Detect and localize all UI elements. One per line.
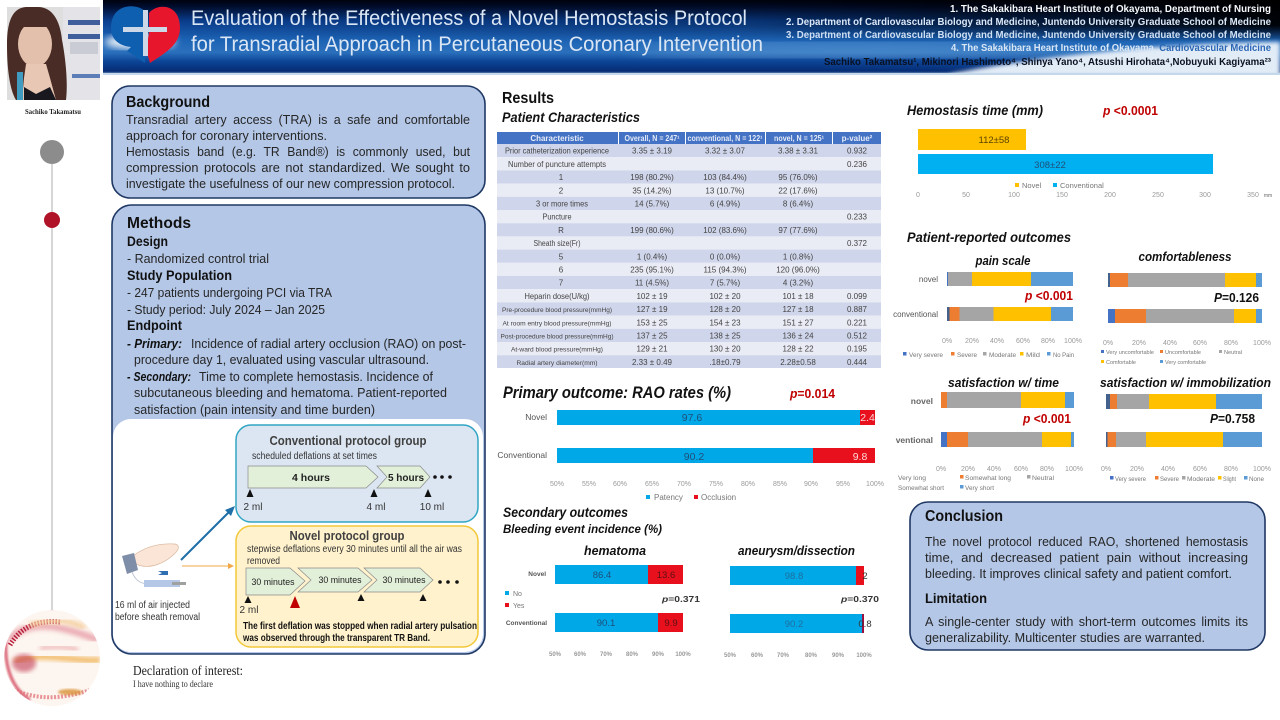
bar chart: hemostasis time: 112±58 bbox=[979, 135, 1009, 146]
stacked bar chart: comfortableness: Very comfortable bbox=[1165, 360, 1206, 366]
bar chart: hemostasis time: Conventional bbox=[1060, 181, 1104, 190]
panel: conventional protocol group: 2 ml bbox=[244, 502, 262, 513]
bar chart: hemostasis time: 100 bbox=[1008, 192, 1020, 199]
arrow: to novel group bbox=[182, 563, 234, 569]
bar chart: RAO rates: 2.4 bbox=[860, 412, 875, 424]
poster title bbox=[191, 7, 763, 56]
bar chart: hemostasis time: 150 bbox=[1056, 192, 1068, 199]
table: patient characteristics: 120 (96.0%) bbox=[776, 266, 820, 274]
bar chart: RAO rates: 75% bbox=[709, 481, 723, 488]
bar chart: aneurysm or dissection: 80% bbox=[805, 653, 818, 659]
table: patient characteristics: 4 (3.2%) bbox=[783, 279, 813, 288]
panel: conventional protocol group: 10 ml bbox=[420, 502, 444, 513]
stacked bar chart: satisfaction with time: ventional bbox=[896, 435, 933, 445]
table: patient characteristics: 97 (77.6%) bbox=[778, 226, 818, 235]
stacked bar chart: satisfaction with immobilization: 20% bbox=[1130, 466, 1144, 473]
presenter name: Sachiko Takamatsu bbox=[25, 108, 81, 116]
table: patient characteristics: 35 (14.2%) bbox=[632, 186, 672, 195]
background text: investigate the usefulness of our new compression protocol. bbox=[126, 176, 455, 191]
panel: conventional protocol group: 4 ml bbox=[367, 502, 385, 513]
stacked bar chart: comfortableness: 0% bbox=[1103, 340, 1113, 347]
limitation text bbox=[925, 614, 1248, 645]
stacked bar chart: satisfaction with time: 100% bbox=[1065, 466, 1083, 473]
declaration of interest: Declaration of interest: bbox=[133, 663, 243, 678]
methods text: subcutaneous bleeding and hematoma. Patient-reported bbox=[134, 385, 447, 400]
table: patient characteristics: R bbox=[558, 226, 564, 235]
methods text: - Study period: July 2024 – Jan 2025 bbox=[127, 302, 325, 317]
stacked bar chart: comfortableness: 20% bbox=[1132, 340, 1146, 347]
table: patient characteristics: 0.932 bbox=[847, 147, 868, 156]
bar chart: aneurysm or dissection: 60% bbox=[751, 653, 764, 659]
methods text: Time to complete hemostasis. Incidence of bbox=[199, 369, 433, 384]
stacked bar chart: comfortableness: 100% bbox=[1253, 340, 1271, 347]
bar chart: hemostasis time: 250 bbox=[1152, 192, 1164, 199]
table: patient characteristics: 5 bbox=[559, 252, 564, 261]
table: patient characteristics: 1 bbox=[559, 173, 564, 182]
secondary outcomes heading bbox=[503, 505, 662, 536]
stacked bar chart: pain scale: Mild bbox=[1026, 352, 1040, 359]
bar chart: aneurysm or dissection: 90.2 bbox=[785, 619, 803, 630]
stacked bar chart: pain scale: 40% bbox=[990, 338, 1004, 345]
methods text: - Primary: bbox=[127, 336, 182, 351]
table: patient characteristics: Radial artery diameter(mm) bbox=[516, 360, 598, 367]
hemostasis p value: p <0.0001 bbox=[1102, 103, 1158, 118]
bar chart: hemostasis time: mm bbox=[1264, 193, 1272, 199]
protocol diagram bbox=[113, 419, 483, 652]
affiliations and authors bbox=[786, 3, 1271, 68]
stacked bar chart: satisfaction with time: 40% bbox=[987, 466, 1001, 473]
air injection caption: before sheath removal bbox=[115, 612, 200, 623]
table: patient characteristics: 102 (83.6%) bbox=[703, 226, 747, 235]
poster title: Evaluation of the Effectiveness of a Novel Hemostasis Protocol bbox=[191, 7, 747, 30]
stacked bar chart: satisfaction with time: 0% bbox=[936, 466, 946, 473]
bar chart: hemostasis time: 0 bbox=[916, 192, 920, 199]
table: patient characteristics: 6 bbox=[559, 266, 564, 274]
icon: hand with hemostasis band and syringe bbox=[122, 544, 186, 587]
panel: methods bbox=[112, 205, 485, 654]
stacked bar chart: satisfaction with immobilization: None bbox=[1249, 476, 1264, 483]
bar chart: RAO rates: 65% bbox=[645, 481, 659, 488]
bar chart: hematoma: Novel bbox=[528, 571, 546, 578]
arrow: to conventional group bbox=[181, 506, 235, 560]
methods text: satisfaction (pain intensity and time burden) bbox=[134, 402, 375, 417]
table: patient characteristics: 3 or more times bbox=[536, 200, 588, 208]
table: patient characteristics: 102 ± 20 bbox=[709, 292, 741, 301]
stacked bar chart: comfortableness: 80% bbox=[1224, 340, 1238, 347]
table: patient characteristics: Post-procedure blood pressure(mmHg) bbox=[500, 334, 614, 340]
stacked bar chart: satisfaction with time: Somewhat long bbox=[965, 475, 1011, 482]
bar chart: hematoma: hematoma bbox=[584, 544, 646, 558]
stacked bar chart: satisfaction with time: Very long bbox=[898, 475, 926, 482]
table: patient characteristics: Pre-procedure blood pressure(mmHg) bbox=[502, 307, 612, 314]
author photo bbox=[7, 7, 100, 100]
table: patient characteristics bbox=[497, 132, 881, 368]
declaration of interest: I have nothing to declare bbox=[133, 679, 213, 689]
conclusion text: The novel protocol reduced RAO, shortened hemostasis bbox=[925, 534, 1248, 549]
table: patient characteristics: Heparin dose(U/kg) bbox=[524, 292, 590, 301]
stacked bar chart: satisfaction with immobilization: Slight bbox=[1223, 476, 1236, 483]
table: patient characteristics: p-value² bbox=[842, 134, 873, 143]
table: patient characteristics: 2.28±0.58 bbox=[780, 358, 816, 367]
methods text: Incidence of radial artery occlusion (RAO) on post- bbox=[191, 336, 466, 351]
table: patient characteristics: 115 (94.3%) bbox=[704, 266, 747, 274]
table: patient characteristics: 7 bbox=[559, 279, 564, 288]
methods text: - 247 patients undergoing PCI via TRA bbox=[127, 285, 332, 300]
bar chart: hematoma: p=0.371 bbox=[661, 594, 700, 604]
bar chart: RAO rates: Novel bbox=[525, 412, 547, 422]
patient characteristics heading: Patient Characteristics bbox=[502, 110, 640, 125]
bar chart: RAO rates: 60% bbox=[613, 481, 627, 488]
table: patient characteristics: 6 (4.9%) bbox=[710, 200, 740, 208]
primary outcome p value: p=0.014 bbox=[789, 387, 835, 401]
bar chart: aneurysm or dissection bbox=[724, 544, 879, 659]
stacked bar chart: satisfaction with immobilization: 100% bbox=[1253, 466, 1271, 473]
panel: novel protocol group: was observed through the transparent TR Band. bbox=[242, 633, 430, 644]
panel: novel protocol group: 2 ml bbox=[240, 605, 258, 616]
table: patient characteristics: 3.35 ± 3.19 bbox=[632, 147, 673, 156]
bar chart: hematoma: 9.9 bbox=[664, 618, 678, 629]
stacked bar chart: satisfaction with time: Very short bbox=[965, 485, 994, 492]
air injection caption: 16 ml of air injected bbox=[115, 600, 190, 611]
results heading: Results bbox=[502, 90, 554, 107]
bar chart: hematoma: 13.6 bbox=[657, 570, 675, 581]
table: patient characteristics: 0 (0.0%) bbox=[710, 252, 740, 261]
stacked bar chart: pain scale: 0% bbox=[942, 338, 952, 345]
table: patient characteristics: 0.512 bbox=[847, 332, 868, 340]
table: patient characteristics: 127 ± 18 bbox=[782, 305, 814, 314]
background heading: Background bbox=[126, 94, 210, 111]
table: patient characteristics: 1 (0.4%) bbox=[637, 252, 667, 261]
bar chart: RAO rates: 55% bbox=[582, 481, 596, 488]
stacked bar chart: comfortableness: Neutral bbox=[1224, 350, 1242, 356]
bar chart: hematoma: 100% bbox=[675, 652, 691, 658]
stacked bar chart: pain scale: 80% bbox=[1041, 338, 1055, 345]
stacked bar chart: satisfaction with time: 60% bbox=[1014, 466, 1028, 473]
bar chart: hematoma: Conventional bbox=[506, 620, 547, 627]
table: patient characteristics: 127 ± 19 bbox=[636, 305, 668, 314]
background text: approach for coronary interventions. bbox=[126, 128, 327, 143]
bar chart: RAO rates: 90% bbox=[804, 481, 818, 488]
panel: conventional protocol group: scheduled deflations at set times bbox=[252, 451, 377, 462]
table: patient characteristics: 235 (95.1%) bbox=[630, 266, 674, 274]
hemostasis time heading: Hemostasis time (mm) bbox=[907, 102, 1043, 118]
panel: novel protocol group: 30 minutes bbox=[252, 577, 295, 588]
table: patient characteristics: 0.233 bbox=[847, 213, 868, 222]
limitation heading: Limitation bbox=[925, 591, 987, 606]
bar chart: aneurysm or dissection: 98.8 bbox=[785, 571, 803, 582]
patient-reported outcomes heading: Patient-reported outcomes bbox=[907, 230, 1071, 245]
table: patient characteristics: Overall, N = 247¹ bbox=[624, 134, 680, 143]
bar chart: RAO rates: 50% bbox=[550, 481, 564, 488]
table: patient characteristics: 95 (76.0%) bbox=[778, 173, 818, 182]
stacked bar chart: comfortableness bbox=[1101, 250, 1271, 366]
stacked bar chart: comfortableness: Comfortable bbox=[1106, 360, 1136, 366]
table: patient characteristics: 0.221 bbox=[847, 318, 868, 327]
secondary outcomes heading: Bleeding event incidence (%) bbox=[503, 522, 662, 536]
table: patient characteristics: Prior catheterization experience bbox=[505, 147, 609, 156]
methods text: - Secondary: bbox=[127, 369, 191, 384]
bar chart: RAO rates: 100% bbox=[866, 481, 884, 488]
table: patient characteristics: 153 ± 25 bbox=[636, 318, 668, 327]
stacked bar chart: satisfaction with immobilization: 0% bbox=[1101, 466, 1111, 473]
table: patient characteristics: 11 (4.5%) bbox=[635, 279, 669, 288]
table: patient characteristics: 0.372 bbox=[847, 239, 868, 248]
table: patient characteristics: At-ward blood pressure(mmHg) bbox=[511, 347, 603, 354]
panel: novel protocol group: removed bbox=[247, 556, 280, 567]
bar chart: aneurysm or dissection: 0.8 bbox=[858, 619, 872, 630]
table: patient characteristics: conventional, N = 122¹ bbox=[688, 134, 763, 143]
table: patient characteristics: 2.33 ± 0.49 bbox=[632, 358, 673, 367]
table: patient characteristics: 198 (80.2%) bbox=[630, 173, 674, 182]
bar chart: hematoma: No bbox=[513, 591, 522, 598]
table: patient characteristics: 8 (6.4%) bbox=[783, 200, 813, 208]
stacked bar chart: satisfaction with immobilization: 60% bbox=[1193, 466, 1207, 473]
table: patient characteristics: 3.38 ± 3.31 bbox=[778, 147, 819, 156]
table: patient characteristics: 22 (17.6%) bbox=[778, 186, 818, 195]
methods text: Endpoint bbox=[127, 318, 182, 333]
panel: novel protocol group: Novel protocol group bbox=[290, 529, 405, 543]
stacked bar chart: satisfaction with time: satisfaction w/ time bbox=[948, 376, 1059, 390]
table: patient characteristics: Characteristic bbox=[530, 134, 584, 143]
table: patient characteristics: 102 ± 19 bbox=[636, 292, 668, 301]
bar chart: hemostasis time: 308±22 bbox=[1034, 160, 1066, 171]
table: patient characteristics: 0.444 bbox=[847, 358, 868, 367]
stacked bar chart: pain scale: 60% bbox=[1016, 338, 1030, 345]
table: patient characteristics: Number of puncture attempts bbox=[508, 160, 606, 169]
table: patient characteristics: 0.099 bbox=[847, 292, 868, 301]
methods text: Design bbox=[127, 234, 168, 249]
bar chart: hematoma: Yes bbox=[513, 603, 525, 610]
decorative ornament: string with beads and watercolor ball bbox=[4, 140, 100, 706]
stacked bar chart: satisfaction with immobilization: Severe bbox=[1160, 476, 1179, 483]
stacked bar chart: comfortableness: comfortableness bbox=[1138, 250, 1232, 264]
table: patient characteristics: 14 (5.7%) bbox=[635, 200, 670, 208]
conclusion text bbox=[925, 534, 1248, 581]
stacked bar chart: comfortableness: 40% bbox=[1163, 340, 1177, 347]
table: patient characteristics: 0.887 bbox=[847, 305, 868, 314]
bar chart: hematoma: 90.1 bbox=[597, 618, 615, 629]
table: patient characteristics: 130 ± 20 bbox=[709, 345, 741, 354]
table: patient characteristics: 101 ± 18 bbox=[782, 292, 814, 301]
table: patient characteristics: 0.195 bbox=[847, 345, 868, 354]
table: patient characteristics: 1 (0.8%) bbox=[783, 252, 813, 261]
panel: conventional protocol group: Conventional protocol group bbox=[270, 434, 427, 448]
background text: compression protocols are not standardized. We sought to bbox=[126, 160, 470, 175]
conclusion heading: Conclusion bbox=[925, 508, 1003, 525]
stacked bar chart: pain scale: p <0.001 bbox=[1024, 288, 1073, 303]
bar chart: aneurysm or dissection: 2 bbox=[862, 571, 868, 582]
table: patient characteristics: 13 (10.7%) bbox=[705, 186, 745, 195]
table: patient characteristics: Puncture bbox=[542, 213, 572, 222]
stacked bar chart: satisfaction with time: novel bbox=[911, 396, 933, 406]
bar chart: RAO rates: 70% bbox=[677, 481, 691, 488]
stacked bar chart: satisfaction with time: 20% bbox=[961, 466, 975, 473]
background text: Transradial artery access (TRA) is a safe and comfortable bbox=[126, 112, 470, 127]
secondary outcomes heading: Secondary outcomes bbox=[503, 505, 628, 520]
bar chart: hemostasis time: Novel bbox=[1022, 181, 1042, 190]
bar chart: aneurysm or dissection: 90% bbox=[832, 653, 845, 659]
panel: novel protocol group bbox=[236, 526, 478, 647]
stacked bar chart: satisfaction with time bbox=[896, 376, 1083, 492]
bar chart: RAO rates: 85% bbox=[773, 481, 787, 488]
poster title: for Transradial Approach in Percutaneous Coronary Intervention bbox=[191, 33, 763, 56]
stacked bar chart: comfortableness: 60% bbox=[1193, 340, 1207, 347]
stacked bar chart: comfortableness: Uncomfortable bbox=[1165, 350, 1201, 356]
methods text: Study Population bbox=[127, 268, 232, 283]
stacked bar chart: satisfaction with immobilization: Very severe bbox=[1115, 476, 1146, 483]
stacked bar chart: pain scale: Severe bbox=[957, 352, 977, 359]
bar chart: aneurysm or dissection: 70% bbox=[777, 653, 790, 659]
header banner bbox=[103, 0, 1280, 76]
declaration of interest bbox=[133, 663, 243, 689]
conclusion text: time, and decreased patient pain without increasing bbox=[925, 550, 1248, 565]
bar chart: aneurysm or dissection: 100% bbox=[856, 653, 872, 659]
bar chart: hemostasis time: 350 bbox=[1247, 192, 1259, 199]
stacked bar chart: pain scale: Moderate bbox=[989, 352, 1016, 359]
panel: novel protocol group: The first deflation was stopped when radial artery pulsation bbox=[243, 621, 477, 632]
table: patient characteristics: At room entry blood pressure(mmHg) bbox=[502, 320, 612, 327]
methods text: - Randomized control trial bbox=[127, 251, 269, 266]
bar chart: hemostasis time: 50 bbox=[962, 192, 970, 199]
stacked bar chart: satisfaction with immobilization: 80% bbox=[1224, 466, 1238, 473]
conclusion text: bleeding. It improves clinical safety and patient comfort. bbox=[925, 566, 1232, 581]
bar chart: aneurysm or dissection: p=0.370 bbox=[840, 594, 879, 604]
table: patient characteristics: 138 ± 25 bbox=[709, 332, 741, 340]
stacked bar chart: pain scale: 100% bbox=[1064, 338, 1082, 345]
affiliations and authors: 4. The Sakakibara Heart Institute of Okayama, Cardiovascular Medicine bbox=[951, 42, 1271, 54]
stacked bar chart: satisfaction with immobilization bbox=[1100, 376, 1271, 483]
table: patient characteristics: novel, N = 125¹ bbox=[774, 134, 824, 143]
stacked bar chart: satisfaction with time: Neutral bbox=[1032, 475, 1055, 482]
bar chart: RAO rates: 95% bbox=[836, 481, 850, 488]
bar chart: hematoma: 86.4 bbox=[593, 570, 611, 581]
stacked bar chart: satisfaction with immobilization: satisfaction w/ immobilization bbox=[1100, 376, 1271, 390]
bar chart: hematoma: 70% bbox=[600, 652, 613, 658]
logo: heart with cross bbox=[111, 6, 180, 63]
methods text bbox=[127, 234, 466, 417]
stacked bar chart: satisfaction with time: p <0.001 bbox=[1022, 411, 1071, 426]
table: patient characteristics: 128 ± 22 bbox=[782, 345, 814, 354]
stacked bar chart: pain scale: Very severe bbox=[909, 352, 943, 359]
bar chart: RAO rates: 80% bbox=[741, 481, 755, 488]
bar chart: RAO rates: 9.8 bbox=[853, 451, 867, 463]
bar chart: aneurysm or dissection: aneurysm/dissection bbox=[738, 544, 855, 558]
table: patient characteristics: 2 bbox=[559, 186, 564, 195]
bar chart: hematoma: 90% bbox=[652, 652, 665, 658]
panel: novel protocol group: stepwise deflations every 30 minutes until all the air was bbox=[247, 544, 462, 555]
bar chart: hemostasis time bbox=[916, 129, 1272, 199]
table: patient characteristics: .18±0.79 bbox=[709, 358, 741, 367]
bar chart: RAO rates bbox=[497, 410, 884, 502]
table: patient characteristics: 0.236 bbox=[847, 160, 868, 169]
table: patient characteristics: 151 ± 27 bbox=[782, 318, 814, 327]
stacked bar chart: satisfaction with immobilization: Moderate bbox=[1187, 476, 1215, 483]
panel: conventional protocol group: 4 hours bbox=[292, 472, 330, 484]
stacked bar chart: satisfaction with immobilization: 40% bbox=[1161, 466, 1175, 473]
stacked bar chart: pain scale: novel bbox=[919, 275, 938, 284]
table: patient characteristics: 129 ± 21 bbox=[636, 345, 668, 354]
stacked bar chart: satisfaction with time: Somewhat short bbox=[898, 485, 944, 492]
background text bbox=[126, 112, 470, 191]
methods heading: Methods bbox=[127, 215, 191, 232]
panel: conventional protocol group bbox=[236, 425, 478, 522]
bar chart: RAO rates: Conventional bbox=[497, 450, 547, 460]
stacked bar chart: comfortableness: P=0.126 bbox=[1214, 290, 1259, 305]
air injection caption bbox=[115, 600, 200, 623]
limitation text: A single-center study with short-term outcomes limits its bbox=[925, 614, 1248, 629]
bar chart: hematoma bbox=[505, 544, 700, 658]
panel: novel protocol group: 30 minutes bbox=[318, 575, 362, 586]
stacked bar chart: satisfaction with time: 80% bbox=[1040, 466, 1054, 473]
table: patient characteristics: Sheath size(Fr) bbox=[534, 239, 581, 248]
stacked bar chart: comfortableness: Very uncomfortable bbox=[1106, 350, 1154, 356]
table: patient characteristics: 7 (5.7%) bbox=[710, 279, 740, 288]
bar chart: hematoma: 80% bbox=[626, 652, 639, 658]
table: patient characteristics: 137 ± 25 bbox=[636, 332, 668, 340]
stacked bar chart: pain scale bbox=[893, 254, 1082, 359]
methods text: procedure day 1, evaluated using vascular ultrasound. bbox=[134, 352, 429, 367]
limitation text: generalizability. Multicenter studies are warranted. bbox=[925, 630, 1205, 645]
bar chart: hematoma: 50% bbox=[549, 652, 562, 658]
panel: novel protocol group: 30 minutes bbox=[382, 575, 426, 586]
panel: conclusion bbox=[910, 502, 1265, 650]
table: patient characteristics: 154 ± 23 bbox=[709, 318, 741, 327]
table: patient characteristics: 136 ± 24 bbox=[782, 332, 814, 340]
table: patient characteristics: 103 (84.4%) bbox=[703, 173, 747, 182]
background text: Hemostasis band (e.g. TR Band®) is commonly used, but bbox=[126, 144, 470, 159]
bar chart: aneurysm or dissection: 50% bbox=[724, 653, 737, 659]
table: patient characteristics: 3.32 ± 3.07 bbox=[705, 147, 746, 156]
bar chart: hemostasis time: 300 bbox=[1199, 192, 1211, 199]
stacked bar chart: pain scale: pain scale bbox=[975, 254, 1031, 268]
bar chart: RAO rates: Patency bbox=[654, 493, 683, 502]
primary outcome heading: Primary outcome: RAO rates (%) bbox=[503, 383, 731, 402]
panel: background bbox=[112, 86, 485, 198]
bar chart: hemostasis time: 200 bbox=[1104, 192, 1116, 199]
panel: conventional protocol group: 5 hours bbox=[388, 473, 424, 484]
bar chart: RAO rates: Occlusion bbox=[701, 493, 736, 502]
bar chart: RAO rates: 97.6 bbox=[682, 412, 702, 424]
stacked bar chart: satisfaction with immobilization: P=0.758 bbox=[1210, 411, 1255, 426]
table: patient characteristics: 128 ± 20 bbox=[709, 305, 741, 314]
stacked bar chart: pain scale: No Pain bbox=[1053, 352, 1074, 359]
stacked bar chart: pain scale: 20% bbox=[965, 338, 979, 345]
bar chart: hematoma: 60% bbox=[574, 652, 587, 658]
bar chart: RAO rates: 90.2 bbox=[684, 451, 704, 463]
stacked bar chart: pain scale: conventional bbox=[893, 310, 938, 319]
table: patient characteristics: 199 (80.6%) bbox=[630, 226, 674, 235]
